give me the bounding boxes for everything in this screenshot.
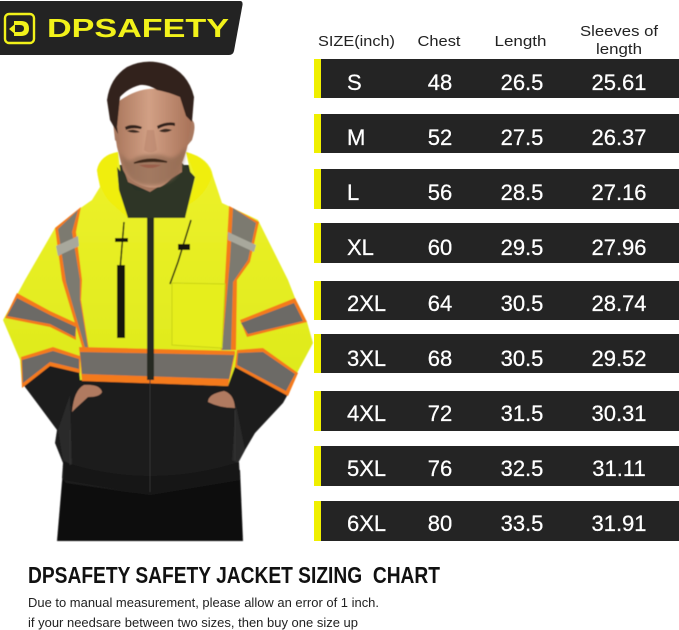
row 6XL: 80 <box>428 511 452 536</box>
row 5XL: 31.11 <box>592 456 646 481</box>
row S: 48 <box>428 70 452 95</box>
row 4XL: 4XL <box>347 401 386 426</box>
row 5XL: 5XL <box>347 456 386 481</box>
sleeve shading <box>58 395 245 465</box>
row L <box>314 169 679 209</box>
collar backing <box>116 165 195 222</box>
row 3XL: 3XL <box>347 346 386 371</box>
right sleeve lower band <box>235 348 298 396</box>
center zipper <box>147 218 154 380</box>
eyes <box>127 129 172 133</box>
row 6XL: 31.91 <box>591 511 647 536</box>
row 2XL: 28.74 <box>591 291 647 316</box>
size table header <box>318 23 659 58</box>
row 2XL <box>314 281 679 320</box>
lower zipper seam <box>70 380 235 492</box>
row 5XL <box>314 446 679 486</box>
row 4XL: 72 <box>428 401 452 426</box>
mustache <box>134 159 167 163</box>
face <box>114 89 192 188</box>
right hand <box>208 391 235 408</box>
row L: 27.16 <box>591 180 647 205</box>
row M <box>314 114 679 153</box>
row 4XL <box>314 391 679 431</box>
row 3XL <box>314 334 679 373</box>
row 4XL: 30.31 <box>591 401 647 426</box>
right sleeve upper band <box>240 298 307 337</box>
right shoulder stripe <box>221 206 259 350</box>
row 2XL: 2XL <box>347 291 386 316</box>
ears <box>113 120 194 146</box>
jacket yellow upper body and sleeves <box>3 152 313 395</box>
size table header: length <box>596 41 642 58</box>
header: length: Length <box>494 33 546 50</box>
brand name: DPSAFETY <box>47 13 229 43</box>
jacket lower black section <box>22 350 288 495</box>
pants <box>57 470 243 541</box>
note: measurement tolerance: Due to manual measurement, please allow an error of 1 inch. <box>28 596 379 610</box>
row L: 56 <box>428 180 452 205</box>
row 5XL: 76 <box>428 456 452 481</box>
row S: 26.5 <box>501 70 543 95</box>
row L: L <box>347 180 359 205</box>
photo: man wearing hi-vis safety jacket <box>3 62 313 541</box>
waist elastic band <box>64 462 240 495</box>
left sleeve lower band <box>21 347 80 388</box>
left shoulder stripe <box>55 207 89 350</box>
row 5XL: 32.5 <box>501 456 543 481</box>
title: DPSAFETY SAFETY JACKET SIZING CHART <box>28 562 440 588</box>
left zipper pocket <box>117 265 125 338</box>
header: sleeves of length: Sleeves of <box>580 23 659 40</box>
stubble beard <box>120 146 186 186</box>
drawcords <box>120 220 191 284</box>
header: size: SIZE(inch) <box>318 33 395 50</box>
row M: 52 <box>428 125 452 150</box>
row XL <box>314 223 679 263</box>
row L: 28.5 <box>501 180 543 205</box>
left sleeve upper band <box>5 293 76 340</box>
row XL: 60 <box>428 235 452 260</box>
row XL: XL <box>347 235 374 260</box>
row 6XL: 6XL <box>347 511 386 536</box>
row 3XL: 68 <box>428 346 452 371</box>
row XL: 29.5 <box>501 235 543 260</box>
row S: S <box>347 70 362 95</box>
row M: 26.37 <box>591 125 647 150</box>
header: chest: Chest <box>418 33 461 50</box>
row 6XL <box>314 501 679 541</box>
row S <box>314 59 679 98</box>
row 3XL: 29.52 <box>591 346 647 371</box>
neck <box>122 160 182 192</box>
hair <box>107 62 194 134</box>
row 6XL: 33.5 <box>501 511 543 536</box>
row M: M <box>347 125 365 150</box>
hood inner <box>97 152 212 218</box>
note: size advice: if your needsare between two sizes, then buy one size up <box>28 616 358 630</box>
nose shadow <box>144 130 157 152</box>
chest pocket <box>172 283 225 348</box>
row 3XL: 30.5 <box>501 346 543 371</box>
brand logo banner <box>0 1 243 55</box>
icon: DP logo mark <box>5 14 34 43</box>
row 2XL: 64 <box>428 291 452 316</box>
row 4XL: 31.5 <box>501 401 543 426</box>
row 2XL: 30.5 <box>501 291 543 316</box>
eyebrows <box>125 122 175 130</box>
mouth <box>139 164 161 168</box>
row S: 25.61 <box>591 70 647 95</box>
chest reflective band <box>79 347 235 386</box>
row XL: 27.96 <box>591 235 647 260</box>
collar <box>117 163 195 218</box>
left hand <box>72 385 102 412</box>
row M: 27.5 <box>501 125 543 150</box>
